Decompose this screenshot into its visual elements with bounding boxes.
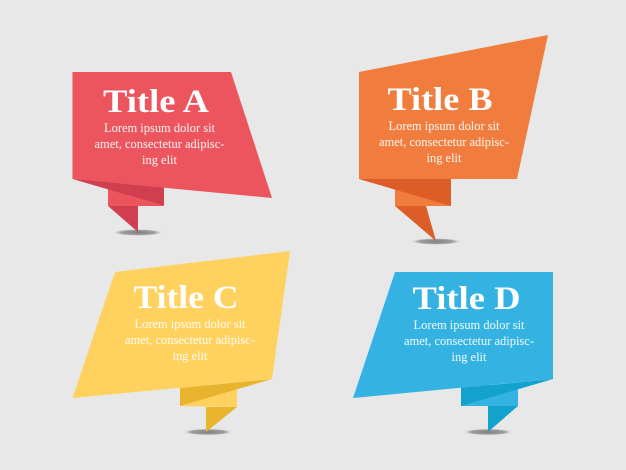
title A: Title A bbox=[103, 84, 209, 120]
fold A bbox=[72, 179, 164, 206]
text C: Lorem ipsum dolor sit bbox=[134, 317, 246, 331]
main panel B bbox=[359, 35, 548, 179]
banner B bbox=[359, 35, 548, 245]
text D: ing elit bbox=[452, 350, 487, 364]
text B: ing elit bbox=[426, 151, 462, 165]
fold B bbox=[359, 179, 451, 206]
ribbon band B bbox=[395, 179, 451, 206]
ribbon band A bbox=[108, 183, 164, 206]
tail C bbox=[206, 407, 237, 432]
text A: ing elit bbox=[142, 153, 178, 167]
text D: Lorem ipsum dolor sit bbox=[414, 318, 525, 332]
text A: Lorem ipsum dolor sit bbox=[104, 121, 216, 135]
shadow D bbox=[464, 429, 512, 435]
shadow B bbox=[412, 238, 460, 245]
text B: Lorem ipsum dolor sit bbox=[388, 119, 500, 133]
banner D bbox=[353, 272, 553, 435]
text A bbox=[94, 121, 224, 167]
ribbon band C bbox=[180, 385, 237, 407]
text B bbox=[379, 119, 509, 165]
banner C bbox=[72, 251, 290, 435]
main panel C bbox=[72, 251, 290, 398]
main panel A bbox=[72, 72, 272, 198]
main panel D bbox=[353, 272, 553, 398]
text C bbox=[125, 317, 255, 363]
tail B bbox=[395, 206, 436, 241]
fold D bbox=[461, 379, 553, 406]
text B: amet, consectetur adipisc- bbox=[379, 135, 509, 149]
title B: Title B bbox=[388, 82, 492, 118]
text D: amet, consectetur adipisc- bbox=[404, 334, 534, 348]
text C: ing elit bbox=[172, 349, 208, 363]
fold C bbox=[180, 379, 272, 406]
title C: Title C bbox=[134, 280, 238, 316]
tail D bbox=[488, 406, 518, 432]
ribbon band D bbox=[461, 385, 518, 406]
banner A bbox=[72, 72, 272, 236]
shadow A bbox=[114, 229, 162, 236]
text A: amet, consectetur adipisc- bbox=[94, 137, 224, 151]
tail A bbox=[108, 206, 138, 232]
text D bbox=[404, 318, 534, 364]
shadow C bbox=[184, 429, 232, 435]
text C: amet, consectetur adipisc- bbox=[125, 333, 255, 347]
title D: Title D bbox=[412, 281, 520, 317]
